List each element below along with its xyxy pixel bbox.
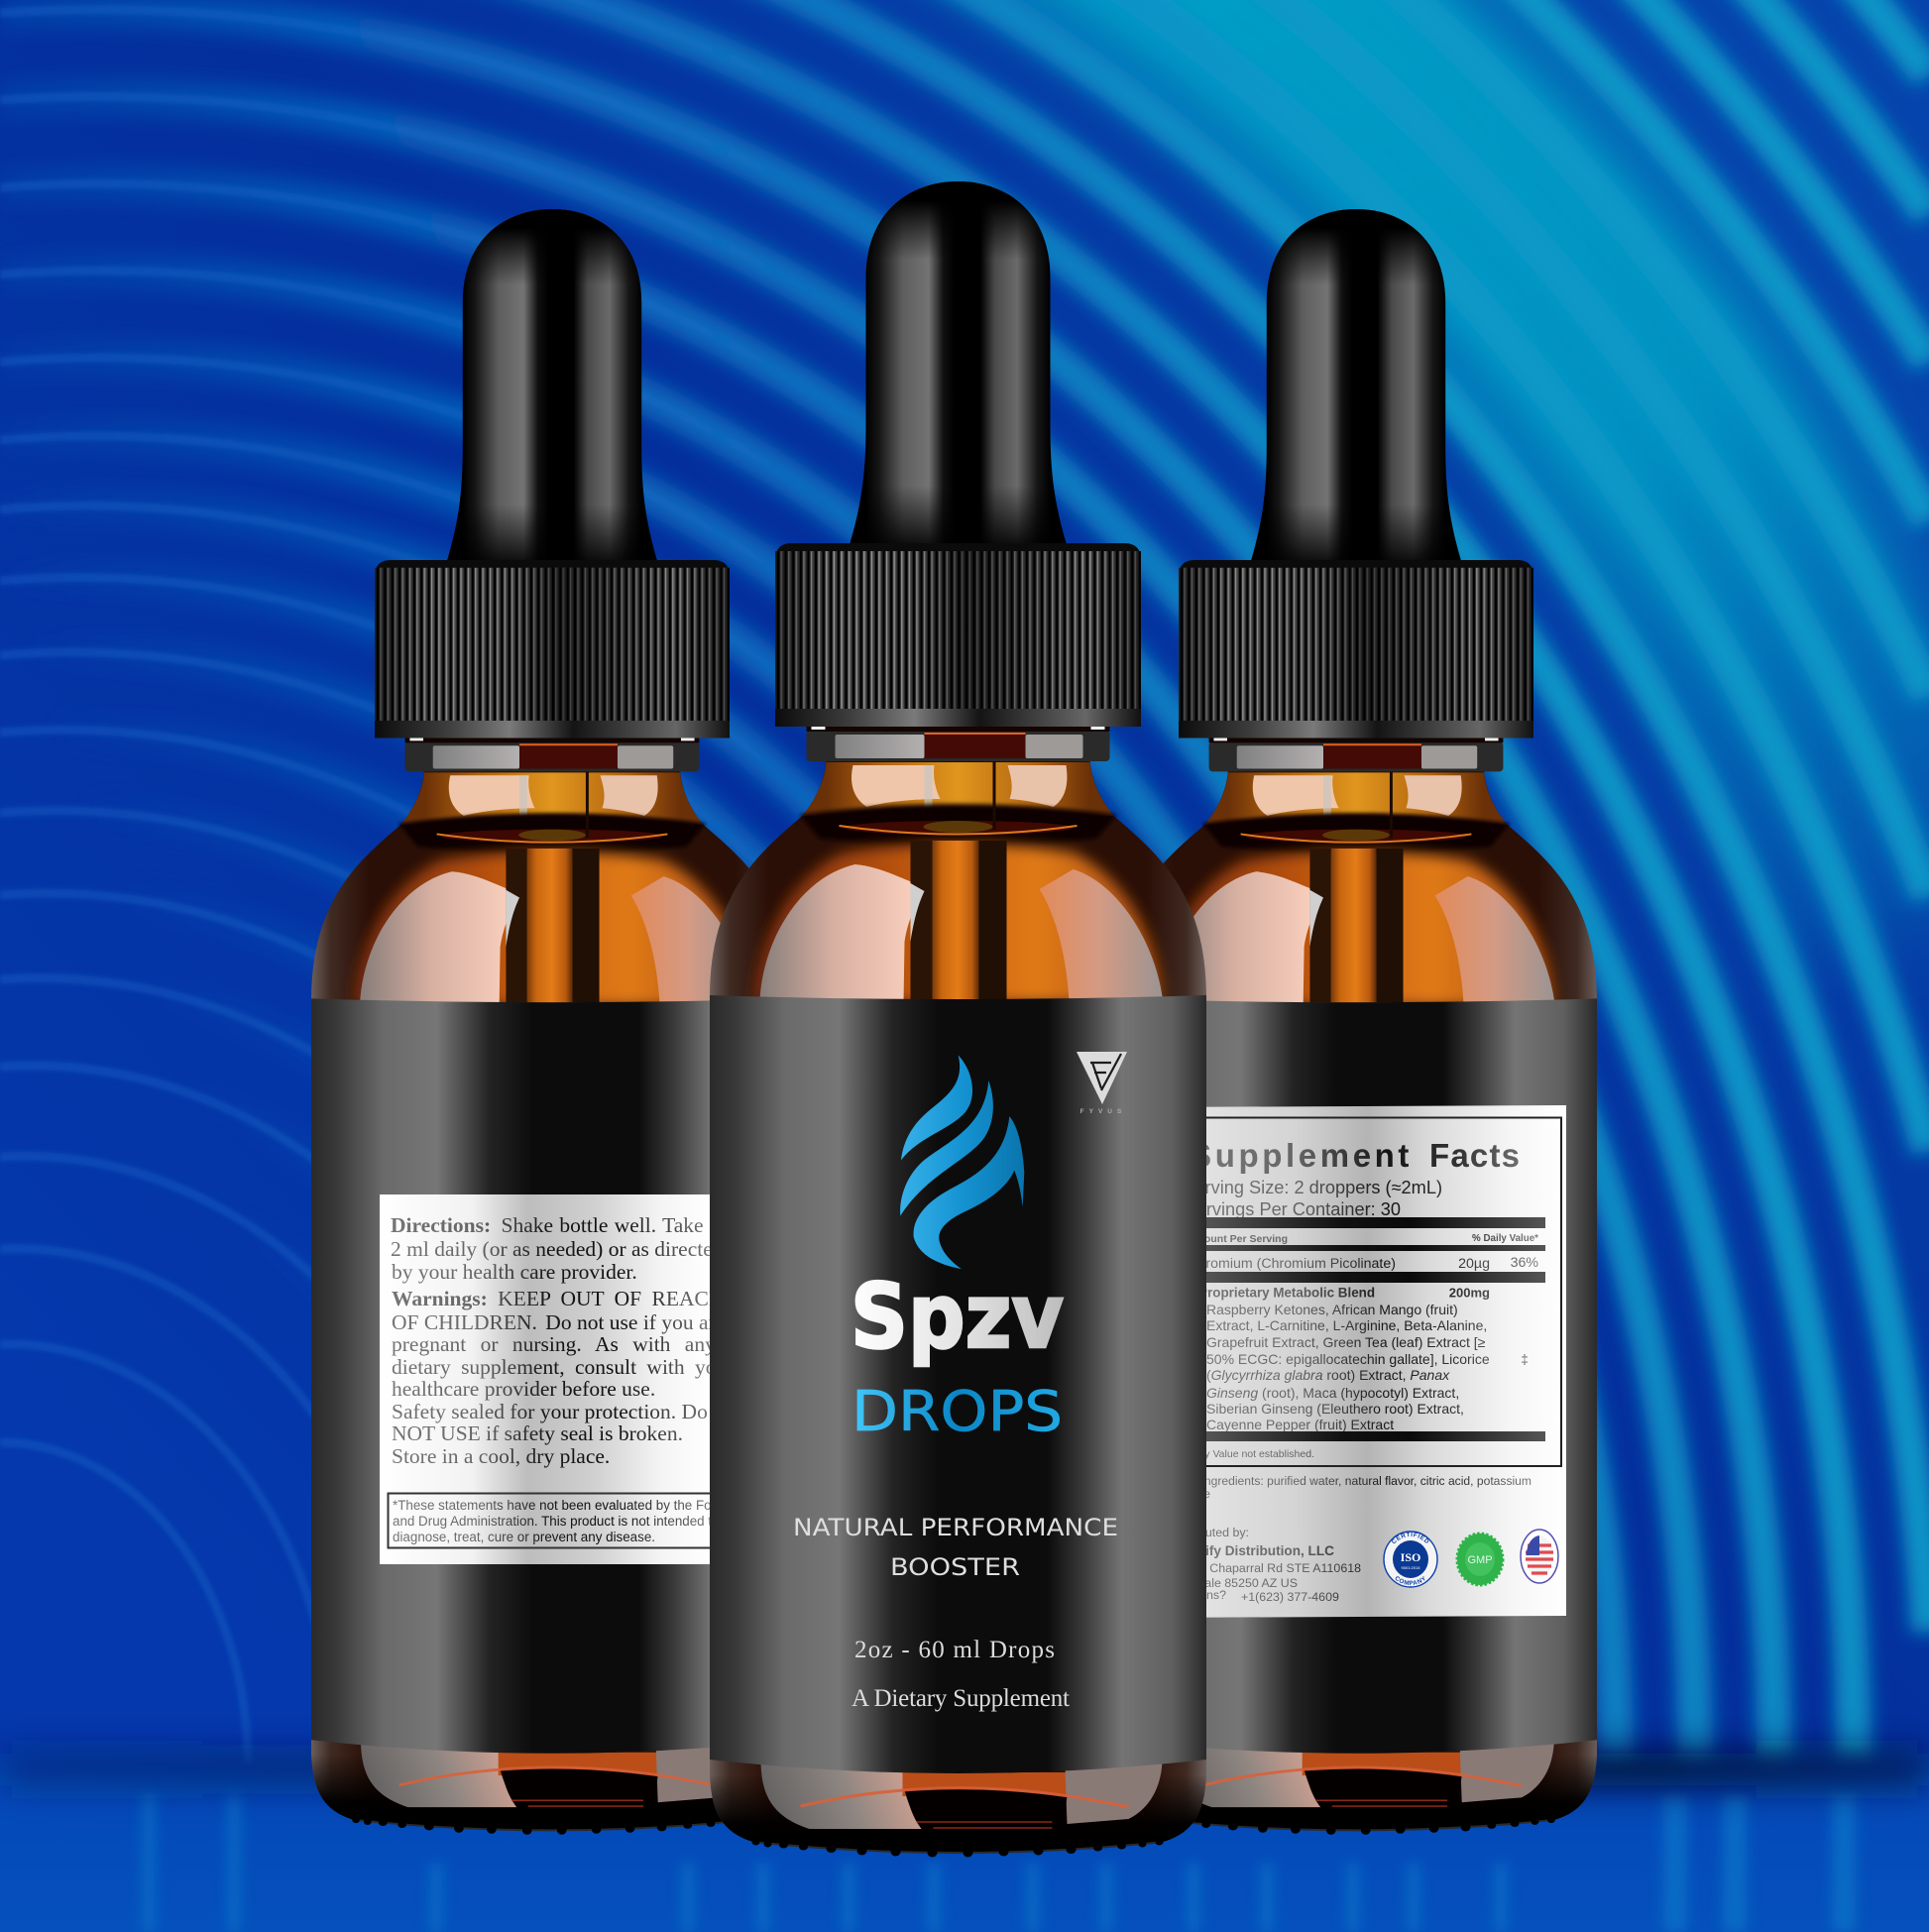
bottle artwork: center	[710, 181, 1206, 1858]
title: Spzv: Spzv	[851, 1265, 1064, 1369]
facts table: Distributed by:	[1171, 1526, 1249, 1539]
text: directions and warnings: NOT USE if safety seal is broken.	[392, 1421, 683, 1445]
facts table: 200mg	[1449, 1285, 1490, 1301]
facts table: Ginseng (root), Maca (hypocotyl) Extract,	[1206, 1385, 1459, 1401]
panel: supplement facts label	[1164, 1105, 1566, 1618]
text: directions and warnings: OF CHILDREN. Do not use if you are	[392, 1310, 725, 1334]
facts table: Serving Size: 2 droppers (≈2mL)	[1183, 1178, 1442, 1197]
icon: ISO badge: 9001:2015	[1402, 1565, 1420, 1570]
bottle: left, directions and warnings	[311, 209, 793, 1835]
text: directions and warnings: by your health care provider.	[392, 1260, 637, 1284]
icon: ISO badge	[1383, 1531, 1438, 1588]
facts table: 1000 E Chaparral Rd STE A110618	[1168, 1561, 1361, 1575]
text: directions and warnings: healthcare provider before use.	[392, 1377, 655, 1401]
facts table: Other Ingredients: purified water, natural flavor, citric acid, potassium	[1168, 1474, 1532, 1488]
text: directions and warnings: 2 ml daily (or as needed) or as directed	[391, 1237, 724, 1261]
text: directions and warnings: Store in a cool, dry place.	[392, 1444, 610, 1468]
tagline: BOOSTER	[890, 1553, 1020, 1581]
icon: ISO badge: COMPANY	[1396, 1576, 1425, 1585]
facts table: Cayenne Pepper (fruit) Extract	[1206, 1417, 1394, 1432]
facts table: 20µg	[1458, 1256, 1490, 1272]
bottle artwork: left	[311, 209, 793, 1835]
facts table: Questions?	[1164, 1588, 1226, 1602]
icon: GMP badge: GMP	[1467, 1554, 1493, 1566]
facts table	[1140, 1178, 1545, 1604]
facts table: 50% ECGC: epigallocatechin gallate], Licorice	[1206, 1351, 1490, 1367]
facts table: Raspberry Ketones, African Mango (fruit)	[1206, 1302, 1458, 1317]
icon: USA flag badge	[1521, 1530, 1558, 1583]
facts table: Chromium (Chromium Picolinate)	[1188, 1256, 1396, 1272]
facts table: sorbate	[1171, 1487, 1210, 1501]
facts table: Scottsdale 85250 AZ US	[1164, 1576, 1298, 1590]
tagline: NATURAL PERFORMANCE	[793, 1514, 1118, 1541]
text: directions and warnings: dietary supplement, consult with your	[392, 1355, 734, 1379]
disclaimer box: *These statements have not been evaluated by the Food	[393, 1498, 726, 1513]
text: directions and warnings: Warnings: KEEP OUT OF REACH	[392, 1287, 724, 1310]
icon: ISO badge: CERTIFIED	[1392, 1533, 1429, 1543]
facts table: ‡Daily Value not established.	[1181, 1448, 1314, 1460]
heading: supplement facts: Facts	[1429, 1137, 1521, 1174]
icon: FYVUS brand mark: FYVUS	[1080, 1108, 1126, 1115]
facts table: +1(623) 377-4609	[1241, 1590, 1339, 1604]
facts table: ‡	[1521, 1351, 1529, 1367]
disclaimer box: and Drug Administration. This product is not intended to	[393, 1514, 720, 1529]
icon: FYVUS brand mark	[1077, 1052, 1127, 1115]
facts table: (Glycyrrhiza glabra root) Extract, Panax	[1206, 1367, 1450, 1383]
text: directions and warnings: Safety sealed for your protection. Do	[392, 1400, 708, 1423]
facts table: Certify Distribution, LLC	[1179, 1543, 1334, 1558]
size and supplement text: A Dietary Supplement	[851, 1685, 1070, 1712]
facts table: Amount Per Serving	[1188, 1233, 1288, 1245]
text: directions and warnings	[391, 1213, 734, 1468]
text: directions and warnings: pregnant or nursing. As with any	[392, 1332, 716, 1356]
bottle artwork: right	[1115, 209, 1597, 1835]
disclaimer box: diagnose, treat, cure or prevent any disease.	[393, 1530, 655, 1544]
icon: ISO badge: ISO	[1401, 1550, 1420, 1564]
disclaimer box	[389, 1493, 726, 1548]
size and supplement text: 2oz - 60 ml Drops	[854, 1637, 1055, 1663]
panel: directions label	[380, 1194, 734, 1564]
size and supplement text	[851, 1637, 1070, 1712]
floor shadow band	[0, 1753, 1929, 1786]
facts table: Proprietary Metabolic Blend	[1198, 1285, 1375, 1301]
text: directions and warnings: Directions: Shake bottle well. Take	[391, 1213, 704, 1237]
tagline	[793, 1514, 1118, 1581]
heading: supplement facts: Supplement	[1190, 1137, 1413, 1174]
bottle: right, supplement facts	[1164, 209, 1597, 1835]
heading: supplement facts	[1190, 1137, 1521, 1174]
floor with vertical reflections	[0, 1745, 1929, 1932]
bottle: center, front label	[710, 181, 1206, 1858]
title: DROPS: DROPS	[851, 1380, 1063, 1444]
facts table: Siberian Ginseng (Eleuthero root) Extract,	[1206, 1401, 1464, 1417]
icon: flame logo	[900, 1056, 1024, 1269]
facts table: Servings Per Container: 30	[1185, 1199, 1401, 1219]
facts table: % Daily Value*	[1472, 1233, 1538, 1244]
facts table: 36%	[1511, 1255, 1538, 1271]
facts table: Grapefruit Extract, Green Tea (leaf) Extract [≥	[1206, 1334, 1486, 1350]
icon: GMP badge	[1457, 1534, 1503, 1585]
facts table: Extract, L-Carnitine, L-Arginine, Beta-Alanine,	[1206, 1317, 1487, 1333]
